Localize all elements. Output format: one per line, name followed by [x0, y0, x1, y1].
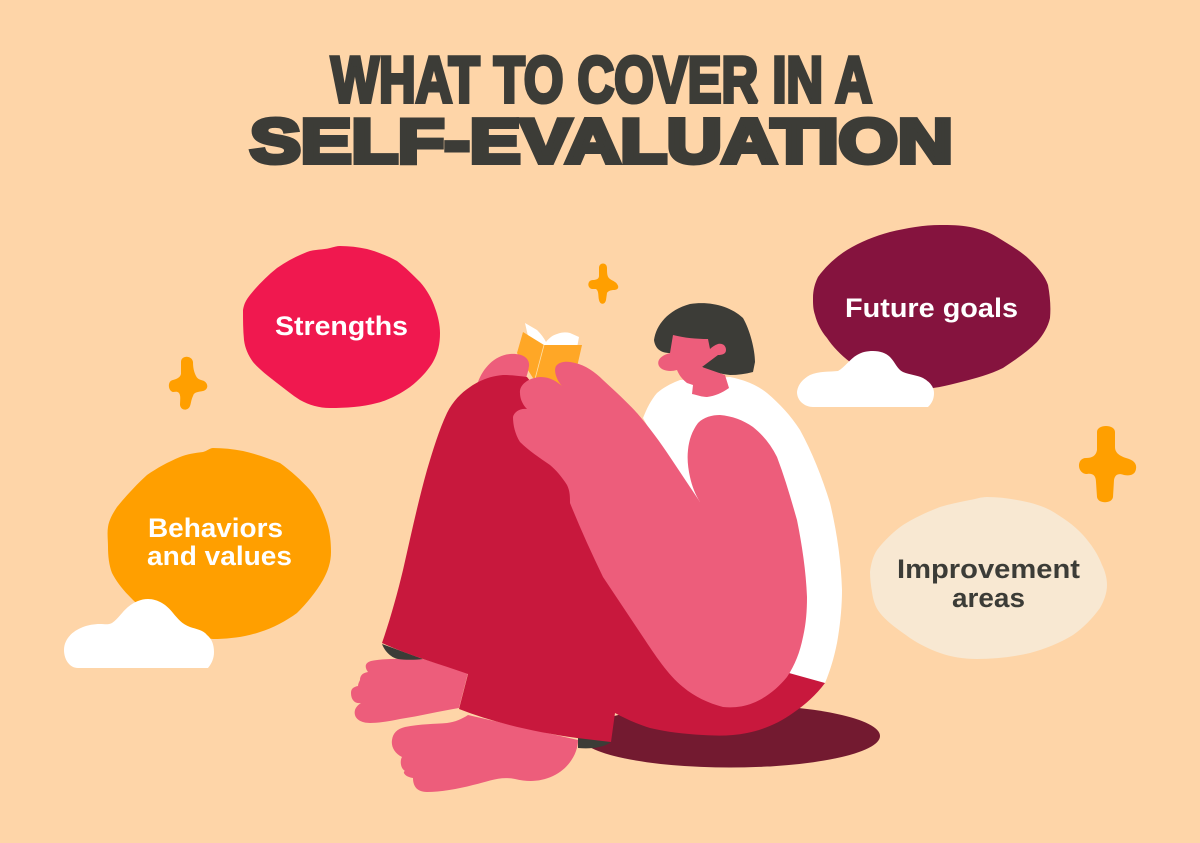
dark shoes edge	[382, 644, 611, 748]
bubble: strengths: Strengths	[275, 311, 408, 341]
bubble: behaviors and values: and values	[147, 541, 292, 571]
sparkle: left	[169, 357, 207, 410]
bubble: improvement areas	[870, 497, 1107, 659]
hair	[654, 303, 755, 375]
cloud: left	[64, 599, 214, 668]
left foot	[351, 659, 468, 723]
bubble: behaviors and values	[108, 448, 331, 639]
cloud: right	[797, 351, 934, 407]
book	[517, 323, 582, 387]
bubble: future goals: Future goals	[845, 293, 1018, 323]
bubble: behaviors and values: Behaviors	[148, 513, 283, 543]
arm and knee	[513, 362, 807, 707]
sparkle: top centre	[588, 264, 618, 304]
bubble: improvement areas: areas	[952, 583, 1025, 613]
bubble: improvement areas: Improvement	[897, 554, 1080, 584]
bubble: strengths	[243, 246, 440, 408]
title: WHAT TO COVER IN A	[331, 44, 872, 116]
title	[250, 44, 953, 176]
trousers	[382, 375, 825, 742]
floor shadow	[580, 704, 880, 768]
right foot	[392, 715, 578, 792]
shirt	[643, 377, 842, 700]
sparkle: right	[1079, 426, 1136, 502]
far hand	[478, 354, 529, 392]
person sitting and reading	[351, 303, 880, 792]
neck and face	[658, 335, 729, 397]
title: SELF-EVALUATION	[250, 106, 953, 176]
bubble: future goals	[813, 225, 1050, 388]
